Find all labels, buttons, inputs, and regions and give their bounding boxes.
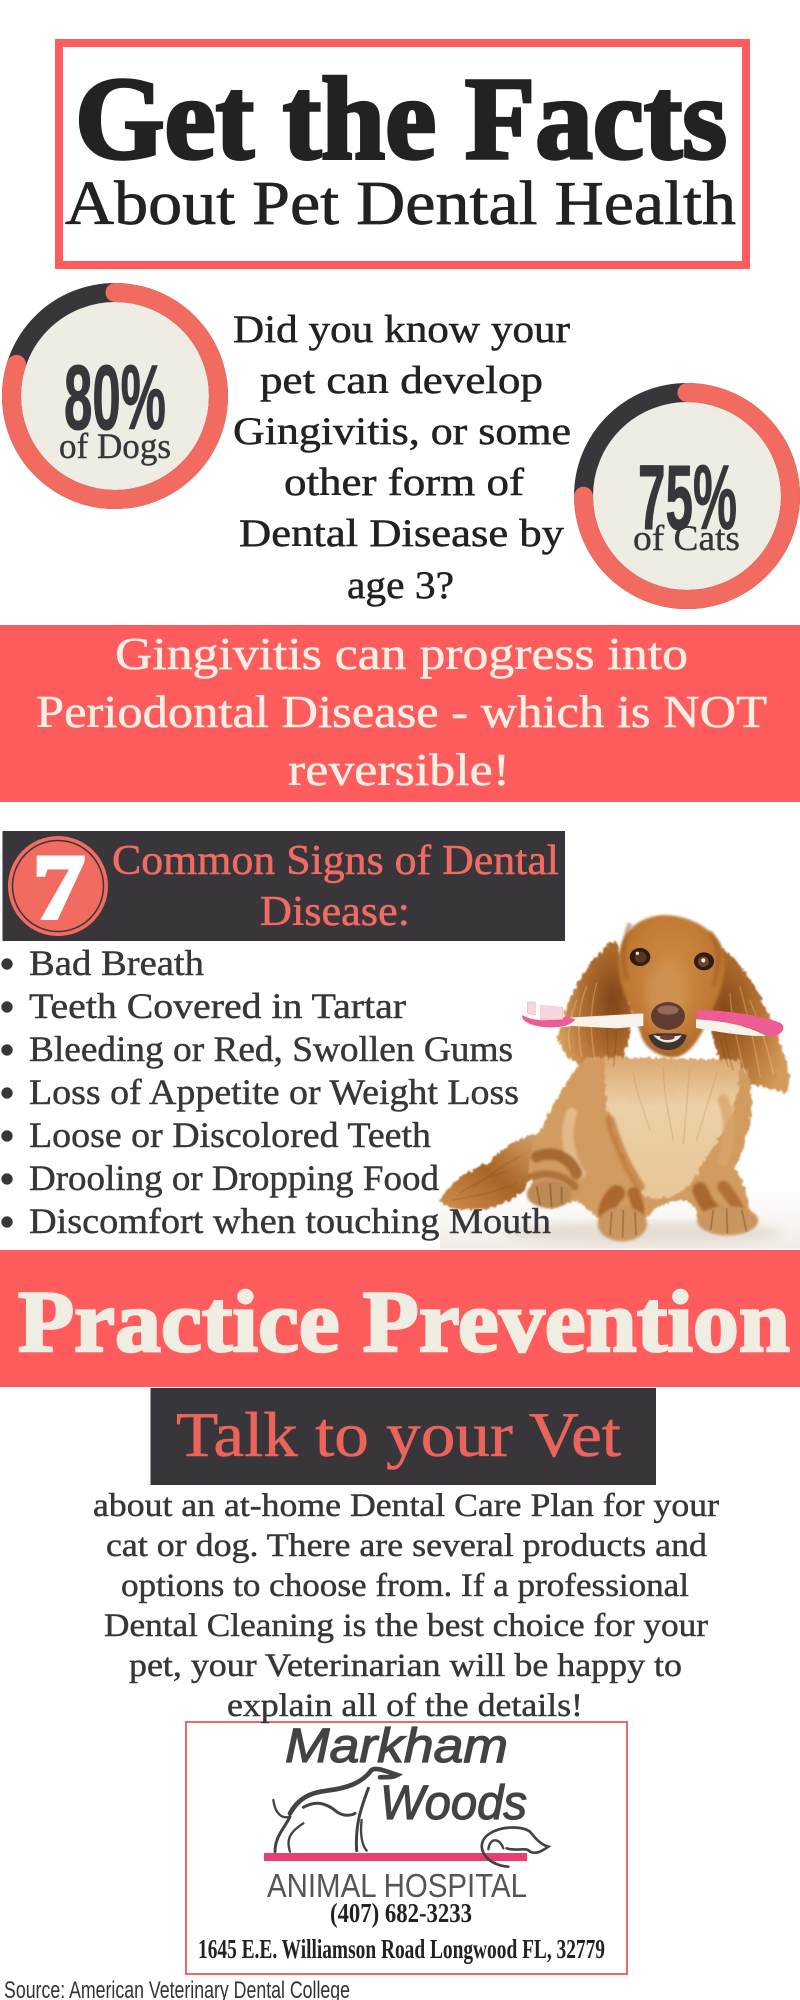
fur strands	[453, 983, 773, 1200]
logo box: Markham Woods Animal Hospital	[186, 1720, 627, 1974]
list: signs of dental disease	[2, 943, 551, 1241]
stat ring: 80% of dogs	[12, 292, 218, 500]
banner: gingivitis warning: reversible!	[288, 744, 510, 795]
intro question text: pet can develop	[260, 359, 543, 402]
stat ring: 75% of cats	[584, 392, 790, 600]
intro question text: Gingivitis, or some	[233, 410, 571, 453]
intro question text	[233, 308, 571, 607]
photo: dog holding toothbrush	[439, 915, 800, 1249]
list: signs of dental disease: Loose or Discolored Teeth	[29, 1115, 431, 1155]
banner: practice prevention: Practice Prevention	[18, 1274, 790, 1371]
list: signs of dental disease: Bad Breath	[29, 943, 204, 983]
banner: gingivitis warning	[0, 625, 800, 802]
list: signs of dental disease: Loss of Appetite or Weight Loss	[29, 1072, 519, 1112]
paragraph: at-home dental care: options to choose from. If a professional	[121, 1568, 689, 1604]
paragraph: at-home dental care: about an at-home Dental Care Plan for your	[93, 1488, 719, 1524]
paragraph: at-home dental care: pet, your Veterinarian will be happy to	[129, 1648, 682, 1684]
logo wordmark: Markham: Markham	[285, 1720, 508, 1773]
list: signs of dental disease: Teeth Covered in Tartar	[29, 986, 406, 1026]
stat ring: 75% of cats: of Cats	[633, 518, 740, 558]
phone number: (407) 682-3233	[330, 1898, 472, 1928]
stat ring: 80% of dogs: 80%	[64, 347, 166, 449]
intro question text: age 3?	[347, 564, 454, 607]
title box	[59, 43, 746, 265]
dog ears	[558, 940, 631, 1074]
dog tail	[439, 1133, 540, 1210]
paragraph: at-home dental care: explain all of the details!	[227, 1688, 583, 1724]
banner: gingivitis warning: Gingivitis can progress into	[115, 628, 688, 679]
toothbrush	[522, 1002, 783, 1037]
list: signs of dental disease: Discomfort when touching Mouth	[29, 1201, 551, 1241]
paragraph: at-home dental care: Dental Cleaning is the best choice for your	[104, 1608, 708, 1644]
heading: 7 common signs: Common Signs of Dental	[112, 838, 559, 884]
list: signs of dental disease: Bleeding or Red, Swollen Gums	[29, 1029, 513, 1069]
logo: greyhound and cat line art	[273, 1769, 548, 1867]
heading: 7 common signs: Disease:	[260, 889, 410, 935]
intro question text: Dental Disease by	[239, 512, 565, 555]
list: signs of dental disease: Drooling or Dropping Food	[29, 1158, 439, 1198]
logo wordmark: Animal Hospital: ANIMAL HOSPITAL	[267, 1867, 527, 1904]
banner: practice prevention	[0, 1250, 800, 1387]
badge: number 7: 7	[33, 836, 85, 938]
heading: talk to your vet	[150, 1388, 656, 1485]
logo wordmark: Woods: Woods	[380, 1777, 527, 1830]
dog chest fur	[605, 1057, 740, 1199]
dog body	[529, 1057, 752, 1222]
heading: talk to your vet: Talk to your Vet	[176, 1399, 621, 1470]
title: Get the Facts: Get the Facts	[75, 53, 727, 184]
address: 1645 E.E. Williamson Road Longwood FL, 32779	[198, 1934, 605, 1964]
paragraph: at-home dental care: cat or dog. There are several products and	[106, 1528, 707, 1564]
heading: 7 common signs	[2, 831, 565, 941]
dog head	[618, 915, 725, 1057]
paragraph: at-home dental care	[93, 1488, 719, 1724]
intro question text: other form of	[284, 461, 524, 504]
banner: gingivitis warning: Periodontal Disease - which is NOT	[36, 686, 767, 737]
fur shading	[533, 1100, 738, 1213]
subtitle: About Pet Dental Health	[65, 170, 736, 238]
intro question text: Did you know your	[233, 308, 570, 351]
stat ring: 80% of dogs: of Dogs	[59, 426, 171, 466]
dog paws	[527, 1180, 758, 1241]
dog nose and mouth	[648, 1002, 687, 1050]
badge: number 7	[8, 836, 108, 938]
dog eyes	[630, 948, 714, 970]
logo: pink bar	[264, 1853, 527, 1861]
